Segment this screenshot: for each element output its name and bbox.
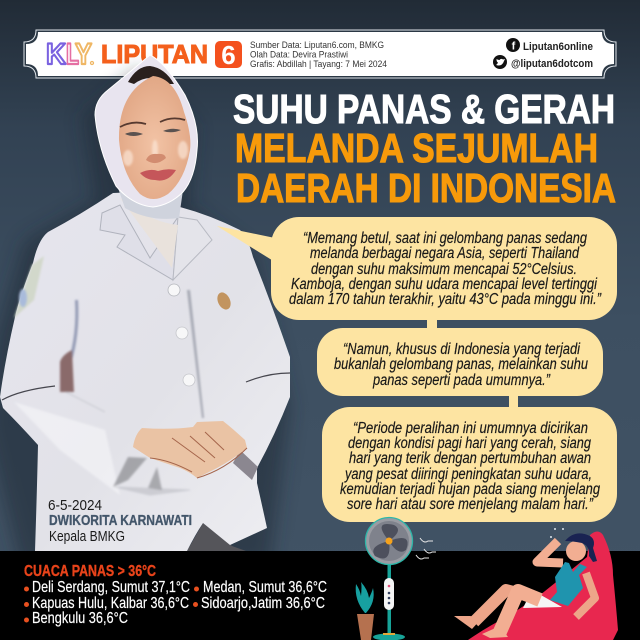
nose [146, 154, 166, 163]
portrait caption: Kepala BMKG [49, 528, 125, 545]
eyes [125, 129, 181, 136]
icon: wind lines [416, 538, 436, 559]
quote bubble 3 [322, 407, 617, 522]
speech bubble tail [217, 226, 275, 262]
logo: KLY [46, 38, 94, 71]
source credits: Grafis: Abdillah | Tayang: 7 Mei 2024 [250, 59, 387, 70]
icon: potted plant [356, 582, 374, 640]
bubble connectors [427, 318, 518, 409]
hair [565, 533, 597, 562]
source credits: Olah Data: Devira Prastiwi [250, 50, 348, 60]
logo: KLY: Y [75, 38, 92, 71]
hot weather list: Kapuas Hulu, Kalbar 36,6°C [32, 595, 189, 612]
portrait caption: DWIKORITA KARNAWATI [49, 512, 192, 529]
quote bubble 3: “Periode peralihan ini umumnya dicirikan [353, 420, 588, 437]
bottom black band [0, 551, 640, 640]
quote bubble 3: sore hari atau sore menjelang malam hari.” [347, 496, 594, 513]
hair [128, 66, 174, 84]
icon: woman on beanbag [454, 528, 618, 640]
source credits: Sumber Data: Liputan6.com, BMKG [250, 40, 384, 51]
quote bubble 1: “Memang betul, saat ini gelombang panas sedang [303, 230, 587, 247]
tank top [550, 562, 587, 606]
shoulder badge [14, 256, 44, 318]
social: facebook: Liputan6online [523, 41, 593, 53]
social: twitter [493, 55, 593, 70]
pin [215, 290, 233, 312]
quote bubble 2: “Namun, khusus di Indonesia yang terjadi [343, 341, 580, 358]
lips [140, 169, 176, 181]
buttons [168, 284, 180, 296]
title [233, 86, 616, 211]
portrait caption: 6-5-2024 [48, 497, 102, 514]
trousers [187, 523, 246, 551]
portrait shadow [0, 68, 290, 566]
back leg [474, 590, 533, 622]
shorts [523, 590, 562, 608]
icon: electric fan [366, 518, 412, 640]
hot weather list: CUACA PANAS > 36°C [24, 563, 156, 580]
source credits [250, 40, 387, 70]
logo: KLY: L [66, 38, 79, 71]
hot weather list: Medan, Sumut 36,6°C [203, 579, 327, 596]
quote bubble 2 [317, 328, 603, 396]
lab coat [0, 190, 290, 551]
quote bubble 3: dengan kondisi pagi hari yang cerah, siang [348, 435, 591, 452]
logo: Liputan 6: 6 [221, 40, 236, 70]
hijab [95, 55, 198, 207]
hot weather list: Sidoarjo,Jatim 36,6°C [201, 595, 325, 612]
face [119, 76, 190, 199]
coat shading [14, 290, 204, 495]
social: facebook: f [512, 40, 516, 52]
sleeve seams [2, 386, 55, 400]
social: twitter: @liputan6dotcom [511, 58, 593, 70]
portrait caption [48, 497, 192, 545]
quote bubble 1: melanda berbagai negara Asia, seperti Thailand [310, 245, 580, 262]
quote bubble 2: panas seperti pada umumnya.” [372, 372, 551, 389]
logo: Liputan 6: LIPUTAN [101, 41, 208, 69]
quote bubble 1 [271, 217, 617, 320]
header banner [24, 30, 616, 78]
raised arm [537, 541, 563, 563]
other arm [576, 573, 595, 617]
sweat drops [550, 528, 564, 538]
hot weather list [24, 563, 327, 627]
clasped hands [133, 421, 247, 478]
sleeve cuffs [233, 450, 258, 480]
quote bubble 2: bukanlah gelombang panas, melainkan suhu [334, 356, 588, 373]
head [566, 541, 586, 561]
hot weather list: Bengkulu 36,6°C [32, 610, 128, 627]
portrait: Dwikorita Karnawati [0, 55, 290, 551]
eyebrows [120, 118, 185, 127]
quote bubble 3: yang pesat diiringi peningkatan suhu udara, [344, 466, 592, 483]
quote bubble 3: hari yang terik dengan pertumbuhan awan [349, 450, 591, 467]
cheek highlights [123, 140, 188, 166]
front leg [499, 591, 540, 634]
hot weather list: Deli Serdang, Sumut 37,1°C [32, 579, 190, 596]
collar and lapels [100, 205, 178, 280]
logo: KLY: K [46, 38, 66, 71]
quote bubble 1: dengan suhu maksimum mencapai 52°Celsius. [311, 261, 577, 278]
beanbag [468, 532, 618, 640]
social: facebook [506, 38, 593, 53]
